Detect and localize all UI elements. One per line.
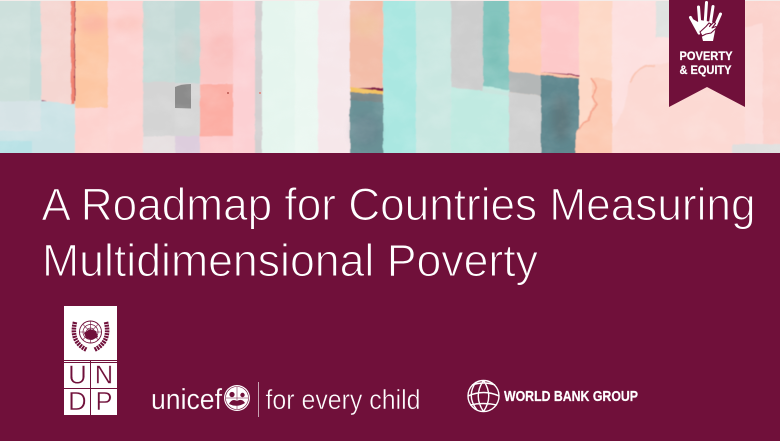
paper grain bbox=[71, 1, 611, 152]
watercolor banner bbox=[0, 0, 780, 157]
logo: World Bank Group bbox=[468, 380, 638, 412]
badge label: & EQUITY bbox=[680, 63, 732, 77]
badge label bbox=[680, 49, 732, 77]
icon: UN emblem bbox=[74, 321, 107, 350]
logo: UNICEF: for every child bbox=[266, 384, 420, 415]
title: A Roadmap for Countries Measuring bbox=[42, 179, 756, 230]
badge label: POVERTY bbox=[680, 49, 732, 63]
title bbox=[42, 179, 756, 286]
UNDP grid lines bbox=[64, 360, 117, 415]
logo: UNICEF: unicef bbox=[151, 384, 223, 416]
logo: UNDP: U bbox=[68, 362, 87, 390]
logo: UNICEF bbox=[151, 382, 420, 417]
logo: UNDP bbox=[64, 306, 117, 416]
icon: UNICEF emblem bbox=[224, 385, 250, 411]
soft wash blotches bbox=[79, 13, 570, 146]
logo: UNDP: P bbox=[95, 388, 113, 416]
logo: UNDP: N bbox=[95, 362, 113, 390]
ribbon badge: poverty and equity bbox=[669, 0, 745, 107]
dark gray patch bbox=[175, 84, 191, 108]
icon: hands bbox=[690, 2, 720, 41]
icon: globe bbox=[468, 380, 499, 412]
logo: UNDP: D bbox=[68, 388, 87, 416]
title: Multidimensional Poverty bbox=[42, 235, 538, 286]
logo: World Bank Group: WORLD BANK GROUP bbox=[504, 389, 638, 405]
